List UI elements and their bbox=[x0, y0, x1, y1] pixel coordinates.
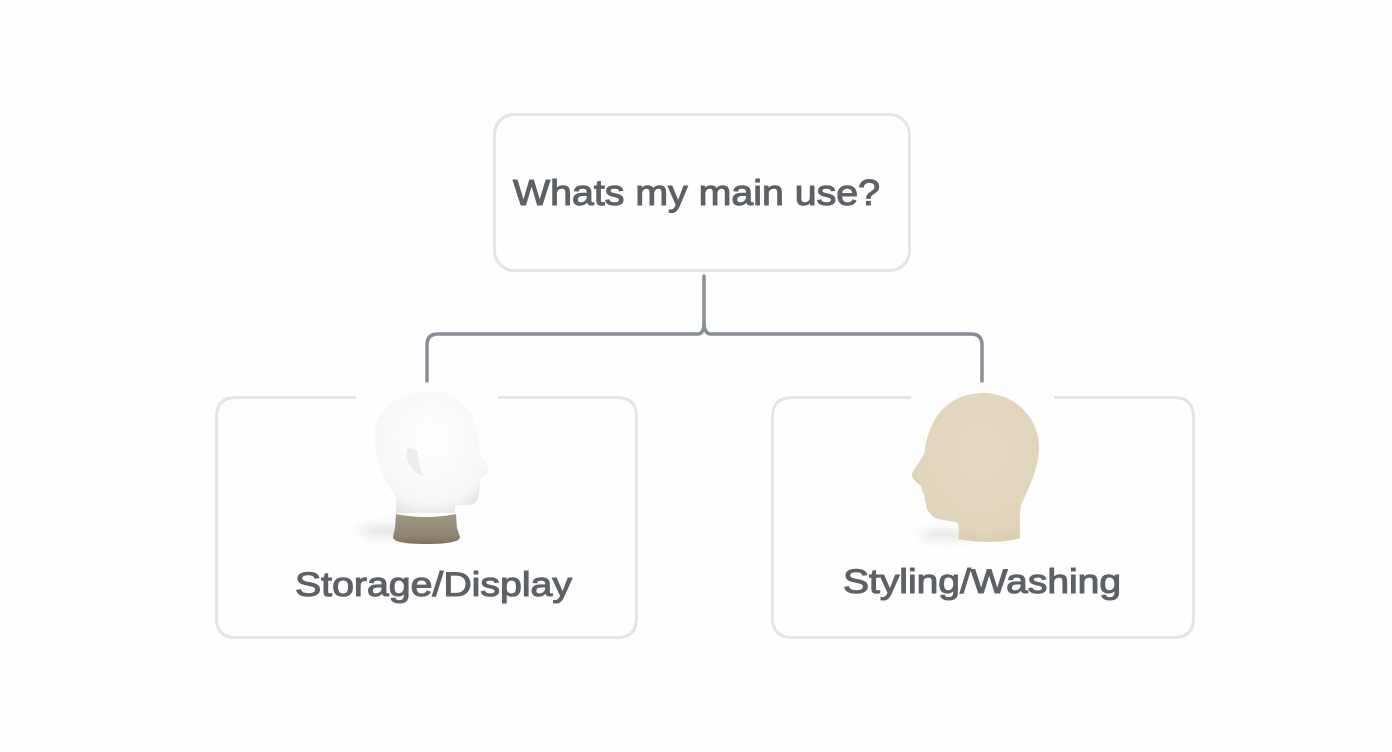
icon: white mannequin head bbox=[358, 391, 488, 544]
panel label: Storage/Display bbox=[295, 566, 572, 604]
panel: storage/display bbox=[216, 391, 636, 638]
question box bbox=[494, 114, 910, 270]
icon: beige mannequin head bbox=[912, 393, 1039, 542]
panel label: Styling/Washing bbox=[843, 563, 1121, 601]
question text: Whats my main use? bbox=[513, 172, 880, 213]
panel outline bbox=[216, 398, 636, 638]
panel outline bbox=[772, 398, 1194, 638]
connector arrows bbox=[427, 276, 982, 381]
collar bbox=[393, 514, 460, 544]
panel: styling/washing bbox=[772, 393, 1194, 638]
